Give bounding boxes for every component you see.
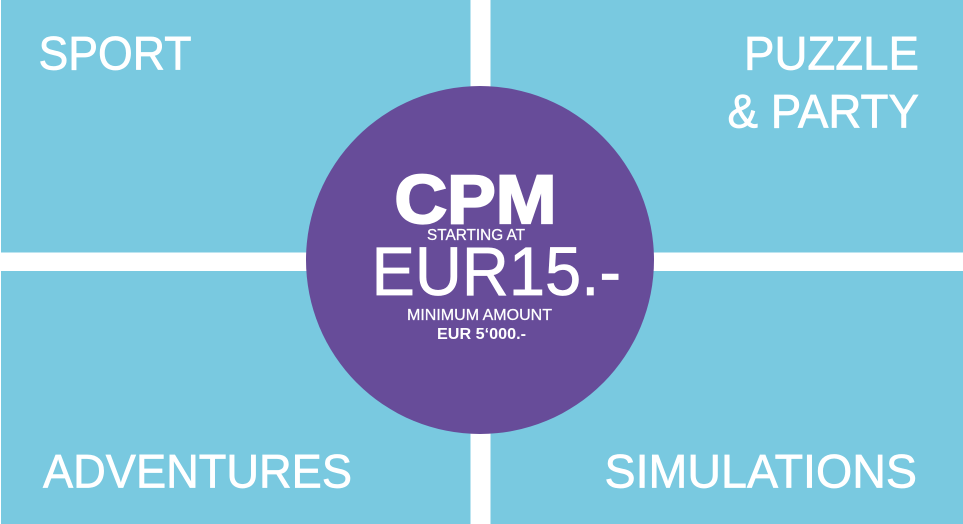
panel: puzzle and party: [490, 0, 963, 252]
panel: simulations: [490, 271, 963, 524]
heading: puzzle and party: PUZZLE: [744, 26, 919, 80]
price: EUR15.-: EUR15.-: [372, 233, 621, 310]
label: minimum amount: MINIMUM AMOUNT: [407, 307, 553, 324]
label: CPM: CPM: [394, 161, 556, 238]
panel: sport: [1, 0, 470, 252]
label: starting at: STARTING AT: [427, 227, 526, 244]
central price circle: [306, 86, 654, 434]
heading: simulations: SIMULATIONS: [604, 444, 917, 498]
heading: sport: SPORT: [38, 26, 192, 80]
value: minimum amount: EUR 5‘000.-: [437, 326, 526, 343]
panel: adventures: [1, 271, 470, 524]
heading: puzzle and party: & PARTY: [728, 84, 919, 138]
heading: puzzle and party: [728, 26, 919, 138]
heading: adventures: ADVENTURES: [43, 444, 352, 498]
